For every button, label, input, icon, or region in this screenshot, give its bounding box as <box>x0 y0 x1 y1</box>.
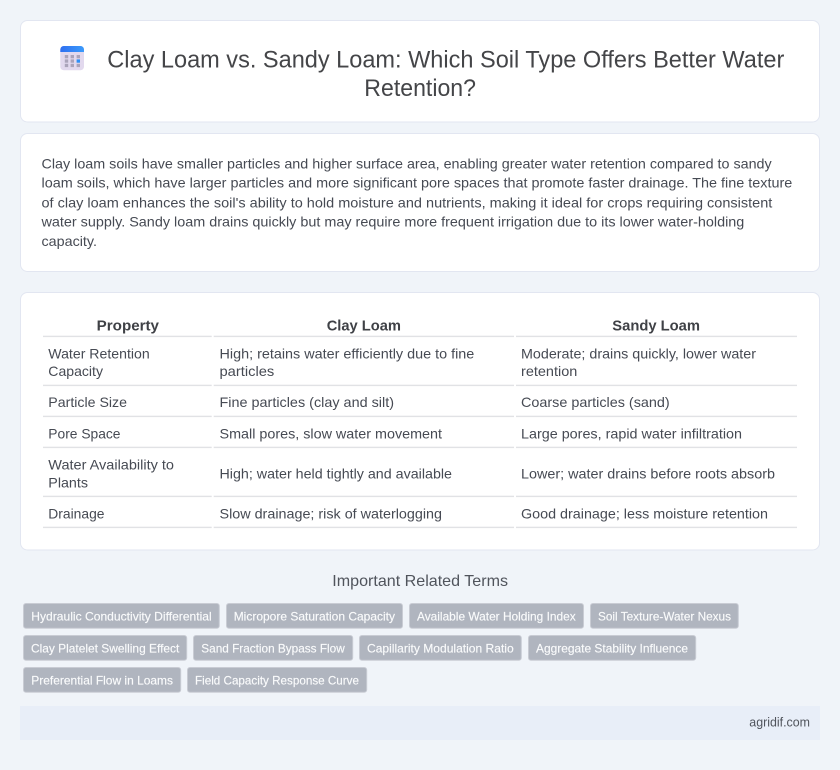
footer bar <box>20 706 820 740</box>
panel: summary paragraph <box>20 134 820 272</box>
text block: summary: of clay loam enhances the soil's ability to hold moisture and nutrients, making it ideal for crops requiring consistent <box>42 194 772 210</box>
panel: comparison table <box>20 292 820 550</box>
table row: water retention capacity: High; retains water efficiently due to fine <box>220 345 475 361</box>
table row: particle size <box>43 394 797 417</box>
table row: water availability to plants: Plants <box>48 474 88 490</box>
table row: water retention capacity: Moderate; drains quickly, lower water <box>521 345 756 361</box>
table header row: Clay Loam <box>327 318 401 335</box>
tag group: related terms: Field Capacity Response Curve <box>195 673 359 687</box>
table row: drainage <box>43 505 797 528</box>
title: Retention? <box>364 75 476 102</box>
icon: calendar grid <box>60 46 84 70</box>
text block: summary: Clay loam soils have smaller particles and higher surface area, enabling greater water retention compared to sandy <box>42 155 772 171</box>
tag group: related terms: Sand Fraction Bypass Flow <box>201 641 345 655</box>
footer bar: agridif.com <box>749 715 810 730</box>
table row: water availability to plants: High; water held tightly and available <box>220 465 452 481</box>
table row: drainage: Drainage <box>48 505 105 521</box>
tag group: related terms: Micropore Saturation Capacity <box>234 609 395 623</box>
tag group: related terms: Preferential Flow in Loams <box>31 673 173 687</box>
title <box>107 46 784 102</box>
text block: summary: loam soils, which have larger particles and more significant pore spaces that promote faster drainage. The fine texture <box>42 175 793 191</box>
tag group: related terms: Clay Platelet Swelling Effect <box>31 641 180 655</box>
text block: summary: water supply. Sandy loam drains quickly but may require more frequent irrigation due to its lower water-holding <box>40 214 744 230</box>
table row: water retention capacity: particles <box>220 363 274 379</box>
table row: water retention capacity: Water Retention <box>48 345 150 361</box>
table row: water retention capacity <box>43 345 797 386</box>
table row: water availability to plants <box>43 456 797 497</box>
table row: pore space: Small pores, slow water movement <box>220 425 442 441</box>
tag group: related terms: Hydraulic Conductivity Differential <box>31 609 212 623</box>
table row: particle size: Coarse particles (sand) <box>521 394 670 410</box>
table row: water availability to plants: Water Availability to <box>48 456 174 472</box>
table row: drainage: Good drainage; less moisture retention <box>521 505 768 521</box>
table header row: Sandy Loam <box>612 318 700 335</box>
tag group: related terms: Soil Texture-Water Nexus <box>598 609 731 623</box>
table row: particle size: Fine particles (clay and silt) <box>220 394 394 410</box>
table row: water retention capacity: Capacity <box>48 363 103 379</box>
title: Clay Loam vs. Sandy Loam: Which Soil Type Offers Better Water <box>107 46 784 74</box>
table row: pore space <box>43 425 797 448</box>
heading: important related terms: Important Related Terms <box>332 573 508 590</box>
panel: title header <box>20 20 820 122</box>
table row: drainage: Slow drainage; risk of waterlogging <box>220 505 442 521</box>
tag group: related terms: Aggregate Stability Influence <box>536 641 688 655</box>
tag group: related terms <box>24 604 738 692</box>
table row: particle size: Particle Size <box>48 394 127 410</box>
tag group: related terms: Available Water Holding Index <box>417 609 576 623</box>
text block: summary: capacity. <box>42 233 97 249</box>
table row: water availability to plants: Lower; water drains before roots absorb <box>521 465 775 481</box>
table row: pore space: Pore Space <box>48 425 121 441</box>
table header row: Property <box>97 318 160 335</box>
tag group: related terms: Capillarity Modulation Ratio <box>367 641 514 655</box>
table row: pore space: Large pores, rapid water infiltration <box>521 425 742 441</box>
table header row <box>43 318 797 337</box>
table row: water retention capacity: retention <box>521 363 577 379</box>
text block: summary <box>40 155 793 249</box>
